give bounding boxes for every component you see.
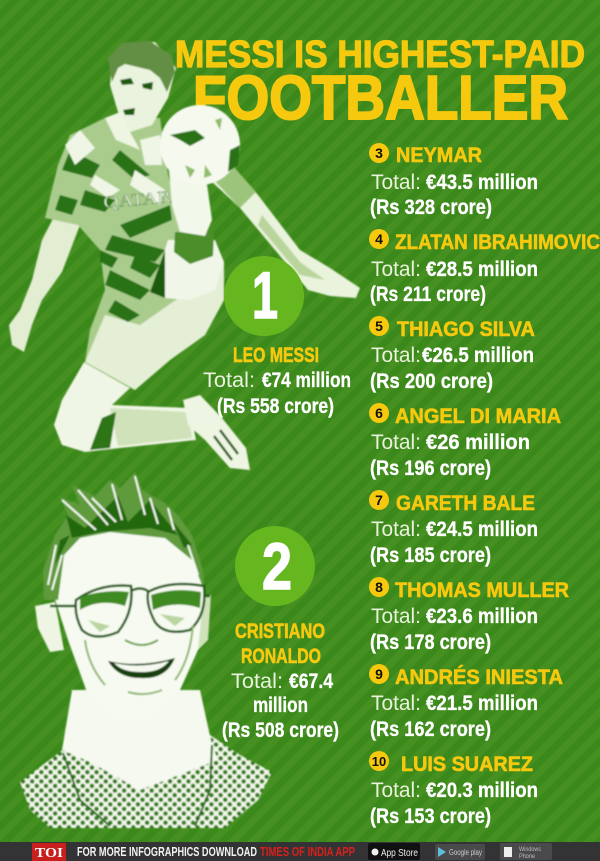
rank 6: Angel Di Maria: (Rs 196 crore) — [370, 457, 491, 480]
footer call to action: TIMES OF INDIA APP — [260, 844, 355, 859]
rank 5: Thiago Silva: Total: — [371, 344, 421, 367]
left arm — [9, 205, 80, 352]
rank 8: Thomas Muller — [369, 577, 569, 654]
rank 9: Andres Iniesta: (Rs 162 crore) — [370, 718, 491, 741]
App Store badge — [368, 843, 420, 860]
ears — [35, 602, 64, 652]
rank 8: Thomas Muller: THOMAS MULLER — [395, 579, 569, 602]
rank 4: Zlatan Ibrahimovic: Total: — [371, 258, 421, 281]
text: Cristiano Ronaldo: Total: — [231, 670, 283, 693]
rank 4: Zlatan Ibrahimovic: 4 — [375, 231, 383, 247]
rank 3: Neymar — [369, 143, 538, 219]
text: Cristiano Ronaldo: CRISTIANO — [235, 620, 325, 643]
rank 4: Zlatan Ibrahimovic: €28.5 million — [426, 258, 538, 281]
photo: Leo Messi — [9, 41, 360, 470]
rank 6: Angel Di Maria: €26 million — [426, 431, 530, 454]
neck — [62, 690, 218, 790]
text: Cristiano Ronaldo: RONALDO — [241, 645, 321, 668]
badge: rank 1: 1 — [252, 258, 278, 332]
Google Play badge — [435, 844, 485, 860]
rank 8: Thomas Muller: 8 — [375, 579, 383, 595]
rank 8: Thomas Muller: €23.6 million — [426, 605, 538, 628]
QATAR sponsor: QATAR — [103, 187, 173, 212]
TOI logo: TOI — [35, 846, 63, 861]
rank 7: Gareth Bale: Total: — [371, 518, 421, 541]
text: Cristiano Ronaldo: €67.4 — [289, 670, 333, 693]
title — [175, 34, 585, 133]
rank 3: Neymar: 3 — [375, 145, 383, 161]
rank 6: Angel Di Maria: 6 — [375, 405, 383, 421]
smile — [108, 658, 175, 678]
rank 7: Gareth Bale: 7 — [375, 492, 383, 508]
text: Leo Messi: LEO MESSI — [233, 344, 319, 367]
TOI logo — [32, 843, 66, 861]
rank 7: Gareth Bale — [369, 490, 538, 567]
photo: Cristiano Ronaldo — [20, 472, 272, 828]
rank 5: Thiago Silva: THIAGO SILVA — [397, 318, 535, 341]
torso and shorts — [45, 118, 224, 390]
hair — [43, 472, 204, 600]
badge: rank 1 — [224, 256, 304, 336]
jersey shading — [55, 150, 172, 322]
Windows Phone badge: Windows — [519, 847, 541, 853]
rank 9: Andres Iniesta: €21.5 million — [426, 692, 538, 715]
boot — [183, 395, 250, 470]
rank 10: Luis Suarez: LUIS SUAREZ — [401, 753, 533, 776]
rank 5: Thiago Silva: (Rs 200 crore) — [370, 370, 493, 393]
raised leg — [160, 240, 224, 300]
rank 8: Thomas Muller: Total: — [371, 605, 421, 628]
text: Leo Messi: €74 million — [262, 369, 351, 392]
App Store badge: App Store — [381, 848, 418, 859]
rank 9: Andres Iniesta — [369, 664, 563, 741]
rank 10: Luis Suarez: €20.3 million — [426, 779, 538, 802]
rank 3: Neymar: (Rs 328 crore) — [370, 196, 492, 219]
rank 3: Neymar: Total: — [371, 171, 421, 194]
rank 4: Zlatan Ibrahimovic: (Rs 211 crore) — [370, 283, 486, 306]
text: Cristiano Ronaldo: million — [253, 694, 308, 717]
Google Play badge: Google play — [449, 848, 482, 857]
rank 5: Thiago Silva: 5 — [375, 318, 383, 334]
Windows Phone badge: Phone — [519, 854, 536, 860]
rank 10: Luis Suarez: Total: — [371, 779, 421, 802]
text: Cristiano Ronaldo — [222, 620, 339, 742]
rank 6: Angel Di Maria — [369, 403, 561, 480]
head — [110, 42, 176, 132]
rank 3: Neymar: €43.5 million — [426, 171, 538, 194]
text: Cristiano Ronaldo: (Rs 508 crore) — [222, 719, 339, 742]
rank 10: Luis Suarez: 10 — [372, 754, 386, 769]
rank 6: Angel Di Maria: ANGEL DI MARIA — [395, 405, 561, 428]
rank 3: Neymar: NEYMAR — [396, 144, 482, 167]
ball — [160, 105, 240, 185]
text: Leo Messi: Total: — [203, 369, 255, 392]
rank 10: Luis Suarez: (Rs 153 crore) — [370, 805, 491, 828]
right arm — [210, 165, 360, 298]
rank 9: Andres Iniesta: Total: — [371, 692, 421, 715]
rank 5: Thiago Silva: €26.5 million — [422, 344, 534, 367]
rank 5: Thiago Silva — [369, 316, 535, 393]
rank 7: Gareth Bale: GARETH BALE — [396, 492, 535, 515]
collar halftone — [20, 735, 272, 828]
text: Leo Messi — [203, 344, 351, 418]
rank 7: Gareth Bale: €24.5 million — [426, 518, 538, 541]
rank 9: Andres Iniesta: ANDRÉS INIESTA — [395, 666, 563, 689]
lower bent leg — [54, 362, 196, 452]
badge: rank 2 — [235, 526, 315, 606]
face — [52, 522, 204, 722]
Windows Phone badge — [500, 843, 552, 860]
rank 4: Zlatan Ibrahimovic — [369, 229, 600, 306]
rank 8: Thomas Muller: (Rs 178 crore) — [370, 631, 491, 654]
badge: rank 2: 2 — [262, 529, 292, 603]
glasses — [50, 584, 210, 637]
footer bar — [0, 842, 600, 861]
text: Leo Messi: (Rs 558 crore) — [217, 395, 334, 418]
footer call to action: FOR MORE INFOGRAPHICS DOWNLOAD — [77, 844, 257, 859]
rank 6: Angel Di Maria: Total: — [371, 431, 421, 454]
rank 9: Andres Iniesta: 9 — [375, 666, 383, 682]
rank 7: Gareth Bale: (Rs 185 crore) — [370, 544, 491, 567]
rank 10: Luis Suarez — [369, 751, 538, 828]
